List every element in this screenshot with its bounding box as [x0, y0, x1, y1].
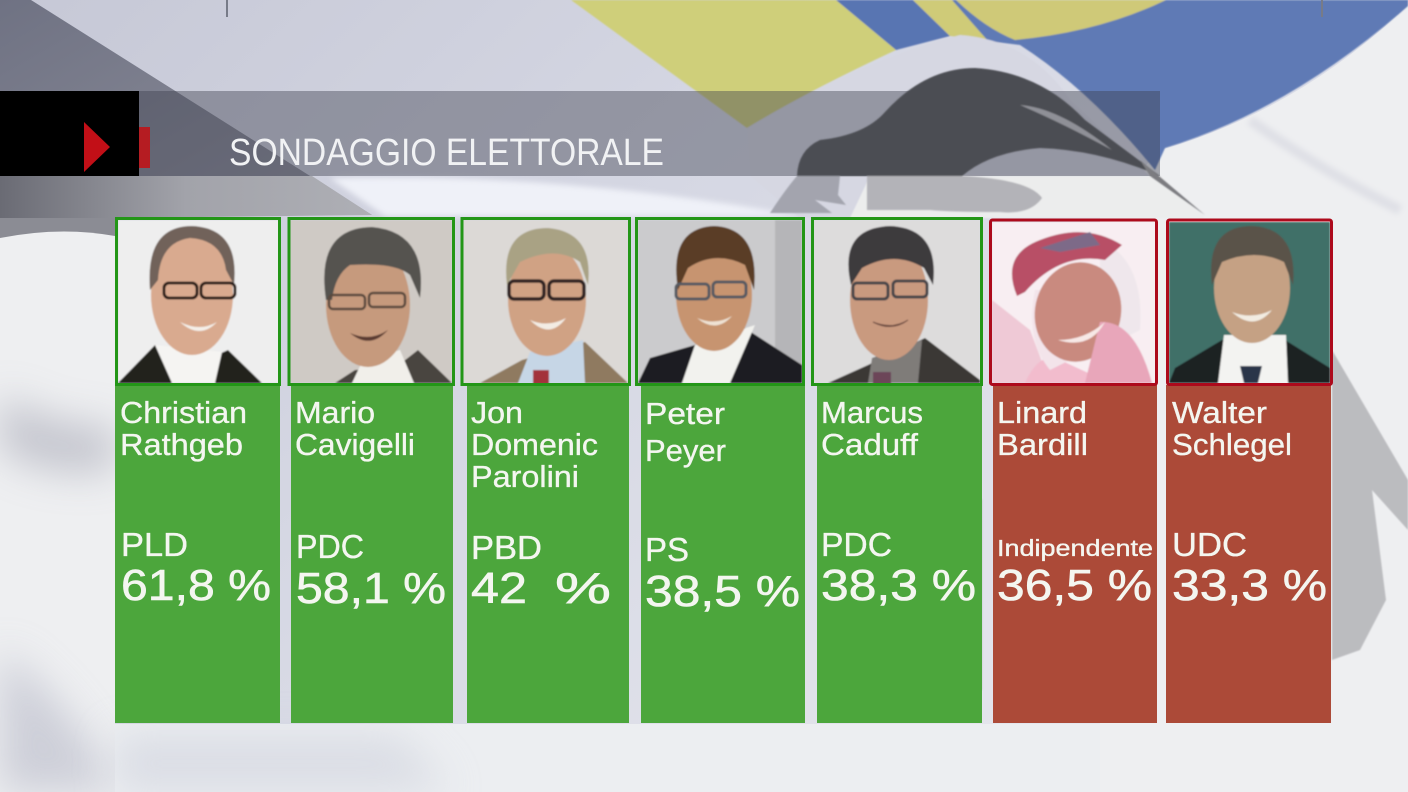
party: PS: [645, 531, 689, 568]
percentage: 33,3 %: [1172, 561, 1327, 610]
portrait frame: [462, 218, 630, 384]
portrait: [1169, 222, 1330, 383]
portrait frame: [116, 218, 280, 384]
party: UDC: [1172, 526, 1247, 563]
candidate: Mario Cavigelli: [289, 218, 454, 723]
name: Caduff: [821, 427, 918, 462]
result panel: [641, 385, 805, 723]
name: Parolini: [471, 459, 579, 494]
portrait frame: [636, 218, 804, 384]
name: Rathgeb: [120, 427, 243, 462]
candidate: Walter Schlegel: [1166, 220, 1332, 723]
name: Peter: [645, 396, 725, 431]
percentage: 38,5 %: [645, 567, 800, 616]
candidate: Marcus Caduff: [812, 218, 982, 723]
name: Schlegel: [1172, 427, 1292, 462]
title bar: [0, 91, 664, 176]
name: Marcus: [821, 395, 923, 430]
result panel: [993, 385, 1157, 723]
party: PDC: [296, 528, 364, 565]
result panel: [1166, 385, 1331, 723]
title bar background: [139, 91, 1160, 176]
flag: yellow and blue fields: [571, 0, 1408, 218]
portrait: [463, 220, 628, 384]
candidate: Jon Domenic Parolini: [462, 218, 630, 723]
portrait: [638, 220, 802, 383]
name: Christian: [120, 395, 247, 430]
party: PBD: [471, 529, 542, 566]
name: Mario: [295, 395, 375, 430]
flag: ibex silhouette: [770, 68, 1205, 690]
percentage: 36,5 %: [997, 561, 1152, 610]
candidate: Linard Bardill: [990, 220, 1157, 723]
party: Indipendente: [997, 535, 1153, 561]
name: Linard: [997, 395, 1087, 430]
name: Cavigelli: [295, 427, 415, 462]
percentage: 58,1 %: [296, 564, 446, 613]
top tick marks: [226, 0, 1323, 17]
party: PDC: [821, 526, 892, 563]
percentage: 42: [471, 564, 527, 613]
percentage: %: [555, 564, 611, 613]
title: SONDAGGIO ELETTORALE: [229, 132, 664, 174]
portrait: [814, 220, 980, 384]
portrait frame: [990, 220, 1156, 384]
portrait: [992, 222, 1155, 383]
percentage: 61,8 %: [121, 561, 271, 610]
name: Walter: [1172, 395, 1267, 430]
name: Domenic: [471, 427, 598, 462]
percentage: 38,3 %: [821, 561, 976, 610]
name: Bardill: [997, 427, 1088, 462]
portrait frame: [289, 218, 454, 384]
candidate: Peter Peyer: [636, 218, 805, 723]
icon: red marker: [139, 127, 150, 168]
result panel: [115, 385, 280, 723]
result panel: [817, 385, 982, 723]
party: PLD: [121, 526, 188, 563]
black logo box: [0, 91, 139, 176]
portrait frame: [1168, 220, 1332, 384]
result panel: [291, 385, 453, 723]
candidate: Christian Rathgeb: [115, 218, 280, 723]
name: Peyer: [645, 433, 726, 468]
portrait: [118, 220, 279, 383]
icon: red arrow: [84, 122, 110, 172]
result panel: [467, 385, 629, 723]
name: Jon: [471, 395, 523, 430]
portrait frame: [812, 218, 982, 384]
portrait: [290, 220, 452, 383]
